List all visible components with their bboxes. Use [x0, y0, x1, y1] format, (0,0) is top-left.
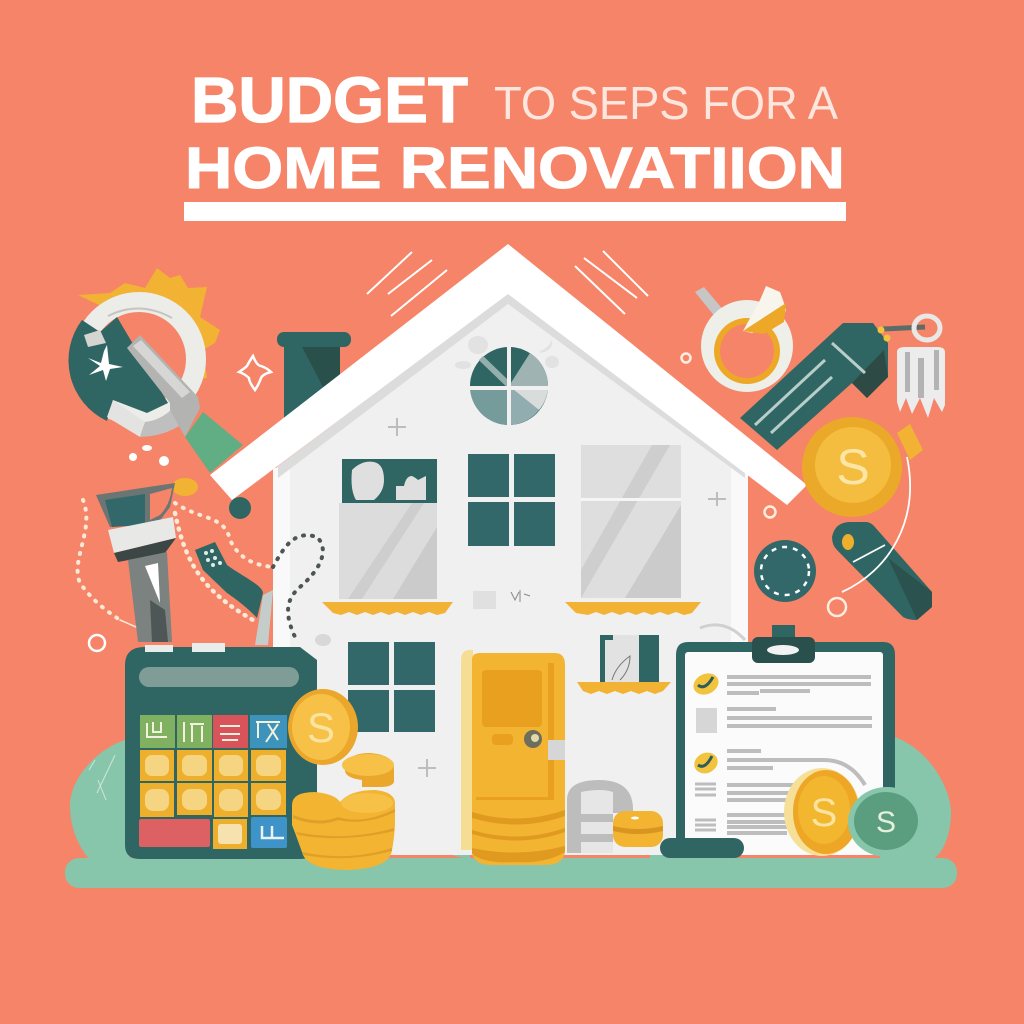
left upper window: [339, 459, 437, 599]
top left wrench: [68, 268, 243, 473]
coin stack left: [288, 689, 395, 870]
coin stack left: S: [307, 704, 335, 751]
handle: [127, 335, 200, 437]
cans: [567, 780, 663, 853]
lower left window: [348, 642, 435, 732]
chimney: [277, 332, 351, 420]
title: TO SEPS FOR A: [494, 77, 838, 129]
coins on clipboard: S: [811, 791, 837, 835]
paintbrush tool: [96, 478, 198, 642]
checklist: [690, 669, 872, 833]
wall marks: [388, 418, 726, 777]
gear: [78, 268, 220, 380]
title: [184, 64, 846, 221]
attic blobs: [455, 336, 559, 369]
comb: [897, 347, 945, 418]
house wall: [273, 295, 748, 855]
large gold coin: [802, 417, 923, 517]
brush head: [195, 542, 273, 645]
lower right window: [600, 635, 659, 682]
ground band: [65, 737, 957, 888]
sparkle: [239, 356, 271, 390]
roof rays: [367, 251, 648, 316]
clipboard: [660, 625, 895, 858]
centre upper window: [468, 454, 555, 546]
dotted wires: [78, 500, 323, 637]
window awnings: [322, 602, 701, 694]
small circles: [682, 354, 846, 616]
roof shadow: [278, 293, 745, 478]
title: BUDGET: [191, 64, 468, 136]
large gold coin: S: [836, 439, 870, 495]
ring: [82, 302, 196, 416]
coins on clipboard: S: [876, 806, 896, 839]
house: [210, 244, 807, 865]
calculator: [125, 643, 317, 859]
hill marks: [89, 755, 115, 800]
dashed badge: [754, 540, 816, 602]
flashlight tool: [832, 457, 932, 620]
round attic window: [468, 345, 550, 427]
lower ring piece: [107, 400, 145, 437]
title: HOME RENOVATIION: [185, 136, 845, 201]
coins on clipboard: [784, 768, 926, 857]
calculator keys: [139, 715, 287, 849]
dark sector: [68, 317, 168, 421]
right upper window: [581, 445, 681, 598]
door: [461, 650, 565, 865]
top right tools: [695, 286, 945, 450]
roof: [210, 244, 807, 505]
